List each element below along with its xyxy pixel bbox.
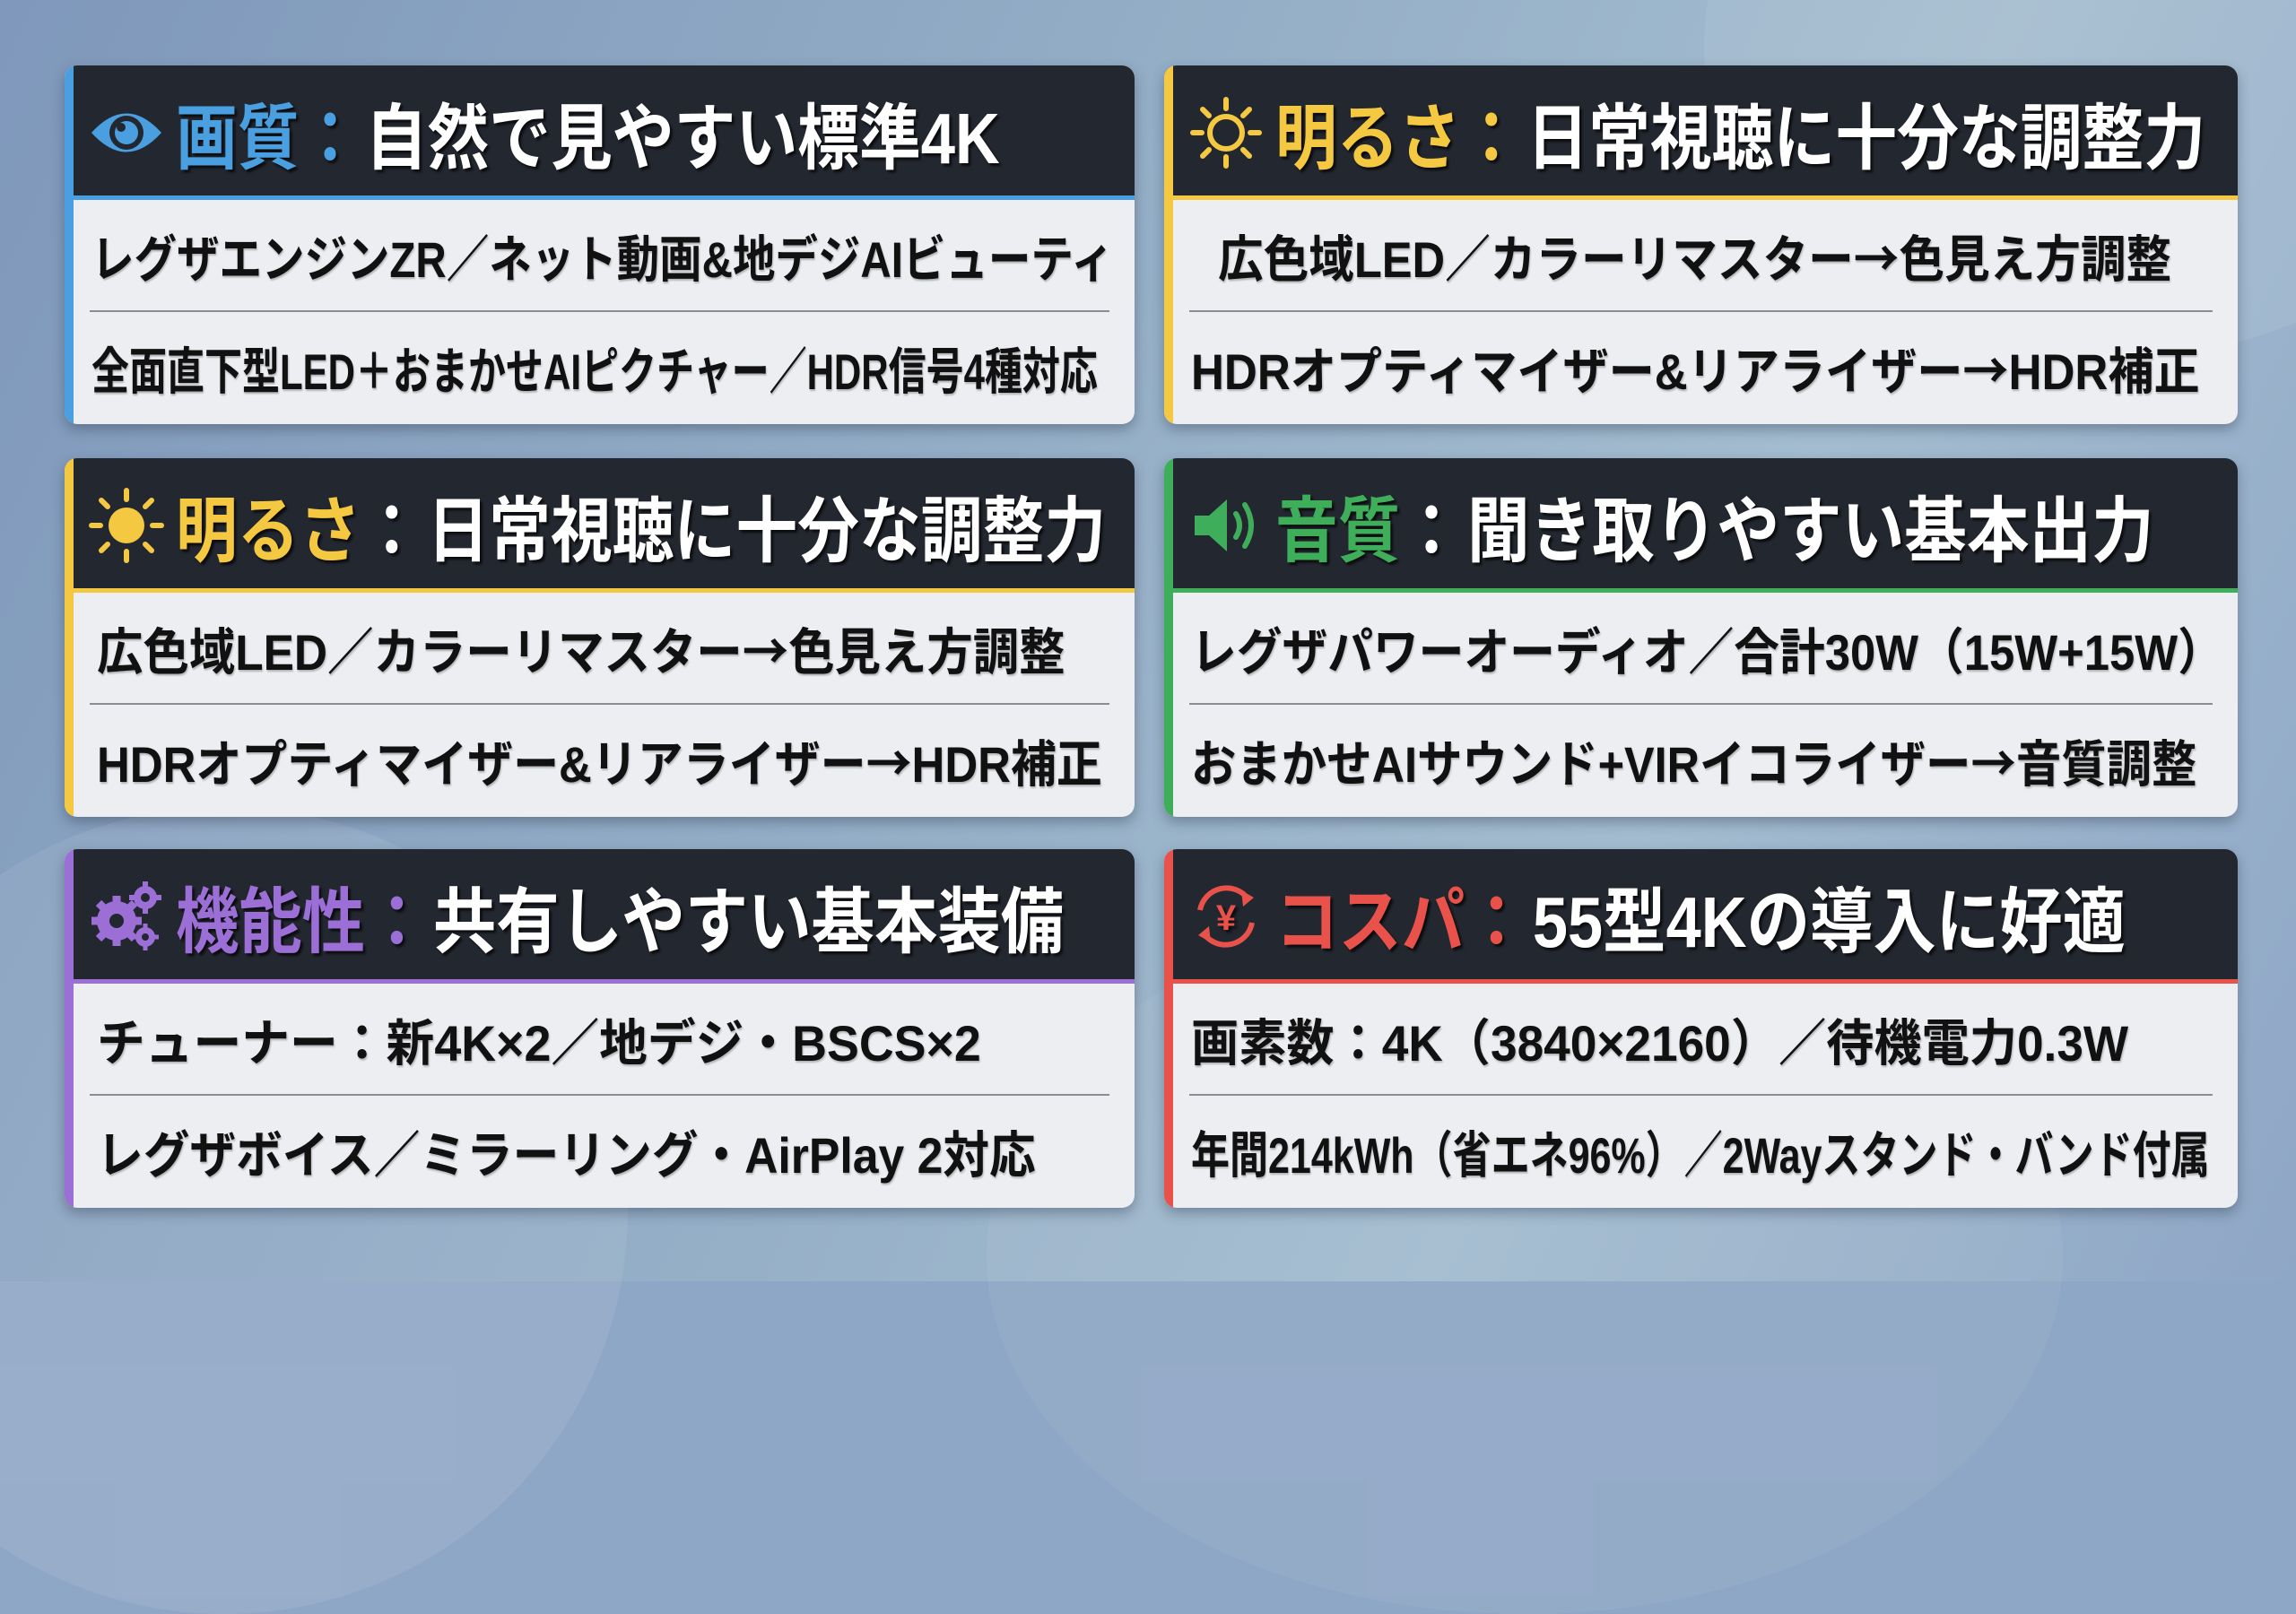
icon: sun filled: [89, 488, 164, 563]
heading: picture quality: 画質：自然で見やすい標準4K: [176, 99, 1000, 178]
icon: yen cycle: [1197, 885, 1255, 948]
heading: sound: [1173, 458, 2238, 593]
text: brightness row 2: HDRオプティマイザー&リアライザー→HDR補正: [1191, 332, 2200, 404]
heading: cost performance: コスパ：55型4Kの導入に好適: [1275, 882, 2126, 962]
panel: brightness (middle left): [65, 458, 1135, 817]
text: cost row 1: 画素数：4K（3840×2160）／待機電力0.3W: [1191, 1015, 2128, 1072]
text: picture row 1: レグザエンジンZR／ネット動画&地デジAIビューティ: [91, 231, 1113, 288]
heading: cost performance: [1173, 849, 2238, 984]
icon: gears: [91, 881, 161, 950]
heading: sound: 音質：聞き取りやすい基本出力: [1275, 491, 2154, 571]
heading: functionality: [74, 849, 1135, 984]
panel: brightness (top right): [1164, 65, 2238, 424]
text: sound row 2: おまかせAIサウンド+VIRイコライザー→音質調整: [1191, 725, 2196, 797]
panel: sound: [1164, 458, 2238, 817]
text: brightness row 1: 広色域LED／カラーリマスター→色見え方調整: [97, 612, 1065, 685]
icon: speaker: [1195, 499, 1254, 551]
heading: functionality: 機能性：共有しやすい基本装備: [176, 882, 1064, 962]
text: sound row 1: レグザパワーオーディオ／合計30W（15W+15W）: [1191, 624, 2223, 681]
text: cost row 2: 年間214kWh（省エネ96%）／2Wayスタンド・バンド付属: [1191, 1127, 2210, 1184]
text: functionality row 1: チューナー：新4K×2／地デジ・BSCS×2: [97, 1015, 981, 1072]
text: functionality row 2: レグザボイス／ミラーリング・AirPlay 2対応: [97, 1127, 1036, 1184]
text: brightness row 2: HDRオプティマイザー&リアライザー→HDR補正: [97, 725, 1102, 797]
icon: sun: [1190, 97, 1262, 169]
heading: brightness: [1173, 65, 2238, 200]
heading: brightness: 明るさ：日常視聴に十分な調整力: [1275, 99, 2205, 178]
panel: functionality: [65, 849, 1135, 1208]
icon: yen cycle: ¥: [1216, 898, 1237, 938]
panel: picture quality: [65, 65, 1135, 424]
heading: brightness: [74, 458, 1135, 593]
panel: cost performance: [1164, 849, 2238, 1208]
heading: brightness: 明るさ：日常視聴に十分な調整力: [176, 491, 1106, 571]
text: brightness row 1: 広色域LED／カラーリマスター→色見え方調整: [1218, 220, 2171, 292]
text: picture row 2: 全面直下型LED＋おまかせAIピクチャー／HDR信号4種対応: [91, 343, 1098, 400]
icon: eye: [91, 113, 161, 152]
heading: picture quality: [74, 65, 1135, 200]
